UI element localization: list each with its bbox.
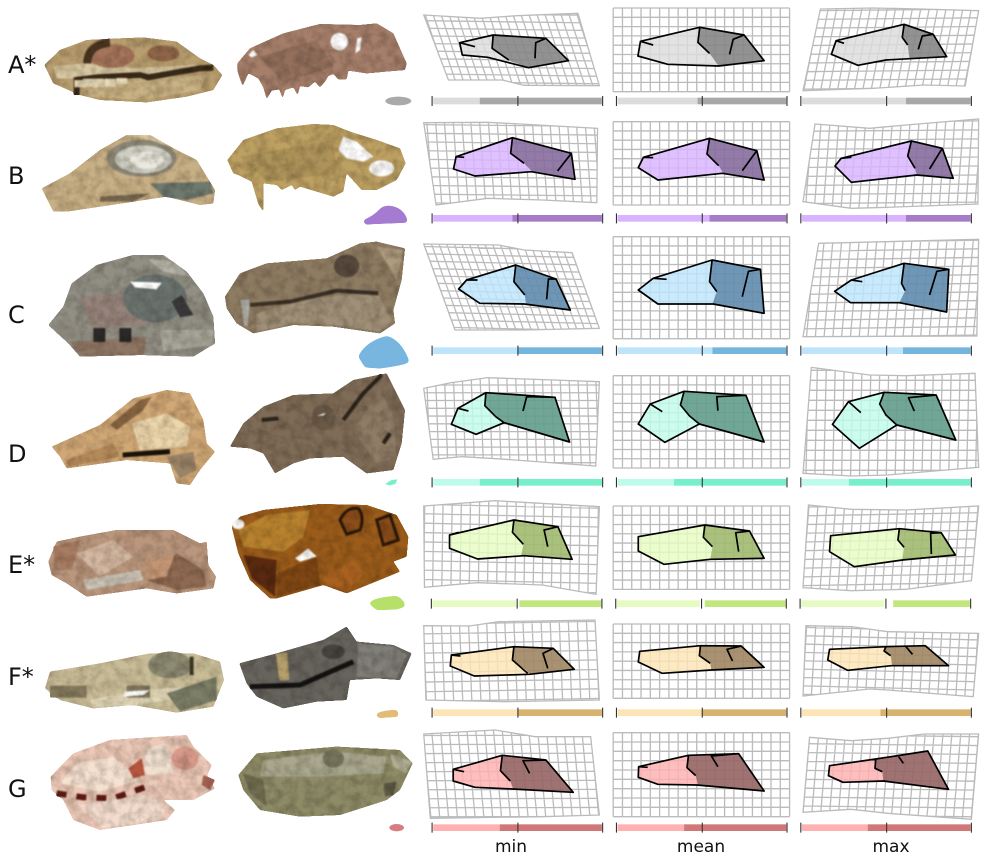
grid A min (422, 12, 600, 86)
label D: D (8, 440, 26, 468)
grid E max (802, 504, 980, 592)
grid F mean (613, 624, 790, 698)
column captions (495, 837, 910, 857)
skull F left (45, 652, 224, 713)
skull specimens rows C and D (48, 242, 409, 485)
scale bar D max (801, 477, 971, 487)
skull C right (225, 242, 405, 333)
body outline: teal D (385, 479, 397, 485)
deformation grids row G (423, 729, 980, 833)
deformation grids row E (423, 500, 980, 609)
grid C mean (613, 237, 790, 339)
grid D min (423, 377, 600, 467)
skull specimens rows E, F and G (45, 504, 413, 831)
grid D mean (613, 376, 790, 468)
scale bar E max (800, 599, 971, 609)
body outline: grey A (385, 97, 411, 105)
grid C max (802, 238, 980, 338)
scale bar B mean (616, 213, 787, 223)
label B: B (8, 162, 24, 190)
body outline: purple B (363, 206, 407, 225)
scale bar D min (432, 477, 603, 487)
label E*: E* (8, 551, 35, 579)
skull E right (232, 504, 408, 598)
skull G left (51, 735, 215, 830)
scale bar G max (801, 823, 971, 833)
caption mean: mean (677, 837, 725, 857)
grid E mean (613, 506, 790, 589)
body outline: blue C (358, 336, 409, 368)
caption min: min (495, 837, 527, 857)
grid B min (423, 122, 598, 206)
scale bar C max (801, 346, 971, 356)
grid G mean (613, 733, 790, 817)
grid D max (802, 366, 980, 477)
skull B right (227, 124, 406, 212)
scale bar D mean (616, 477, 787, 487)
label A*: A* (8, 51, 36, 79)
grid F max (802, 625, 980, 698)
skull D left (52, 390, 215, 485)
label G: G (8, 775, 27, 803)
scale bar C min (432, 346, 603, 356)
label F*: F* (8, 663, 34, 691)
scale bar E mean (616, 599, 786, 609)
scale bar A max (801, 96, 971, 106)
skull E left (48, 530, 216, 597)
grid E min (423, 500, 600, 595)
deformation grids row F (423, 619, 980, 718)
skull G right (238, 747, 413, 817)
skull B left (42, 135, 215, 212)
grid A max (802, 7, 980, 92)
grid C min (422, 243, 600, 331)
scale bar F min (432, 708, 603, 718)
scale bar E min (431, 599, 602, 609)
deformation grids row A (422, 7, 980, 106)
scale bar F mean (616, 708, 787, 718)
grid F min (423, 619, 600, 702)
scale bar G min (432, 823, 603, 833)
skull C left (48, 255, 215, 357)
scale bar B max (801, 213, 971, 223)
skull F right (239, 627, 412, 708)
deformation grids row B (423, 118, 980, 224)
deformation grids row C (422, 236, 980, 356)
skull D right (230, 373, 405, 473)
grid A mean (613, 8, 790, 92)
skull A left (44, 37, 222, 102)
grid G max (802, 733, 980, 820)
scale bar G mean (616, 823, 787, 833)
scale bar F max (801, 708, 971, 718)
grid G min (423, 729, 600, 819)
grid B mean (613, 122, 790, 205)
caption max: max (872, 837, 910, 857)
label C: C (8, 301, 25, 329)
skull specimens rows A and B (42, 23, 411, 225)
scale bar B min (432, 213, 603, 223)
scale bar C mean (616, 346, 787, 356)
skull A right (237, 23, 407, 99)
deformation grids row D (423, 366, 980, 488)
grid B max (802, 118, 980, 209)
scale bar A min (432, 96, 603, 106)
scale bar A mean (616, 96, 787, 106)
body outline: red G (389, 824, 404, 831)
body outline: green E (369, 596, 405, 610)
row labels (8, 51, 36, 803)
body outline: tan F (376, 710, 399, 718)
